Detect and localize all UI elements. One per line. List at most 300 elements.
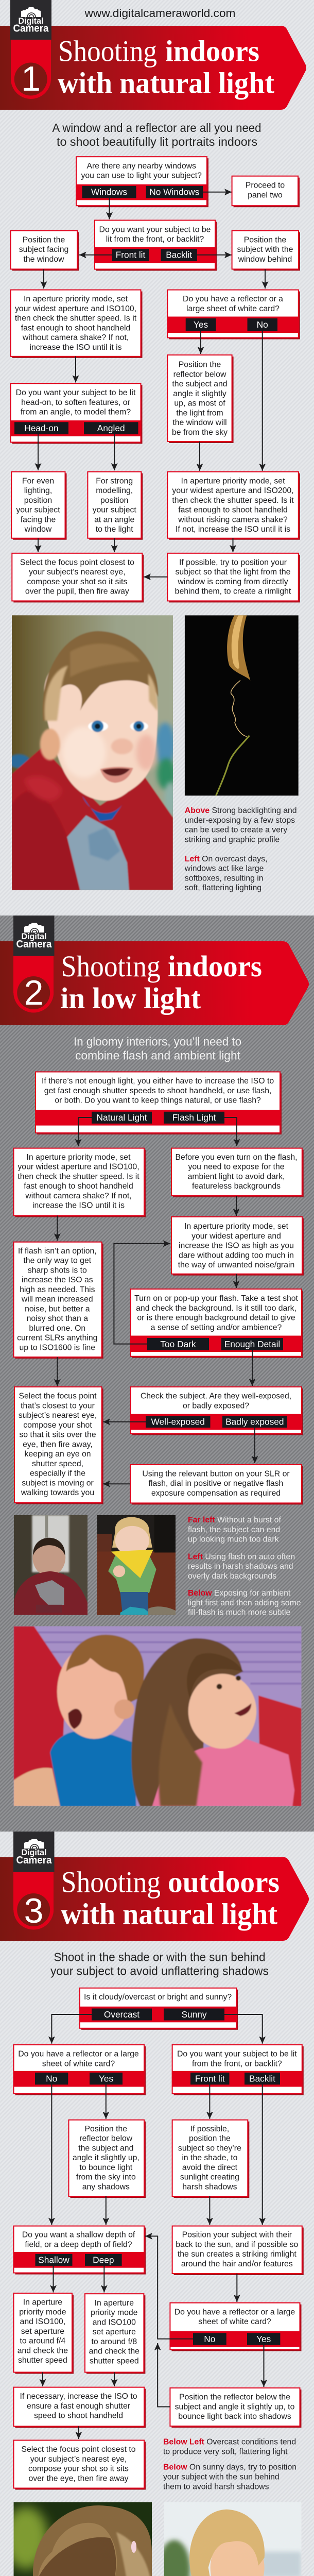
box: f/4: priority mode	[19, 2308, 66, 2316]
intro text section 2	[74, 1035, 241, 1062]
box: even lighting: For even	[22, 477, 54, 485]
decision: nearby windows: Windows	[91, 187, 127, 197]
decision: front or backlit outdoors: from the front, or backlit?	[192, 2059, 282, 2068]
box: select focus point section 2: shutter speed,	[32, 1460, 83, 1468]
box: even lighting: position	[24, 496, 52, 505]
box: position reflector: up, as most of	[174, 399, 225, 408]
caption section 1: soft, flattering lighting	[185, 884, 261, 892]
box: aperture priority ISO200: without risking camera shake?	[178, 515, 288, 524]
box: f/8: priority mode	[91, 2309, 138, 2317]
decision: cloudy or sunny: Is it cloudy/overcast or bright and sunny?	[84, 1993, 232, 2002]
decision: head-on or angled	[11, 383, 142, 444]
section 3 banner: 3	[24, 1891, 43, 1930]
intro text section 3: Shoot in the shade or with the sun behind	[54, 1951, 266, 1964]
arrow: backlit	[197, 255, 232, 256]
box: rimlight: behind them, to create a rimlight	[175, 587, 291, 596]
box: even lighting: your subject	[16, 506, 60, 515]
decision: head-on or angled: Angled	[97, 423, 125, 433]
arrow: backlit	[262, 2084, 263, 2225]
box: increase ISO: dare without adding too much in	[179, 1251, 294, 1260]
box: aperture priority low light: your widest aperture and ISO100,	[18, 1163, 139, 1172]
decision: reflector backlit: Do you have a reflector or a large	[175, 2308, 295, 2316]
section 2 banner: indoors	[168, 950, 262, 983]
box: position reflector: angle it slightly	[173, 389, 226, 398]
arrow: too dark loops back	[114, 1244, 170, 1344]
arrow: yes reflector	[264, 2345, 265, 2387]
decision: reflector outdoors: No	[46, 2073, 57, 2083]
decision: test shot	[131, 1289, 303, 1358]
box: if flash isn't an option: the only way to get	[23, 1257, 92, 1265]
box: f/8: In aperture	[95, 2299, 134, 2308]
box: aperture priority ISO200: your widest aperture and ISO200,	[172, 486, 294, 495]
decision: test shot: Enough Detail	[224, 1339, 280, 1349]
box: select focus point section 2: especially if the	[30, 1469, 85, 1478]
decision: front or backlit: Front lit	[116, 249, 146, 260]
arrow: up to depth of field	[158, 2343, 170, 2407]
caption section 1: softboxes, resulting in	[185, 874, 264, 883]
box: f/4: In aperture	[23, 2298, 62, 2307]
photo: backlit silhouette profile	[184, 615, 299, 795]
decision: cloudy or sunny: Sunny	[181, 2009, 207, 2020]
photo: baby too dark against window	[13, 1515, 88, 1615]
caption section 2: fill-flash is much more subtle	[188, 1608, 290, 1617]
box: even lighting: lighting,	[24, 486, 52, 495]
logo section 3: Digital	[22, 1848, 46, 1857]
box: increase ISO: increase the ISO as high as you	[179, 1242, 294, 1250]
photo: laughing girl in pink cardigan	[13, 2502, 152, 2576]
box: position in shade: position the	[189, 2134, 231, 2143]
box: aperture priority low light: without camera shake? If not,	[25, 1192, 132, 1200]
box: if flash isn't an option: increase the ISO as	[22, 1276, 93, 1284]
caption section 3	[163, 2438, 296, 2491]
box: position reflector outdoors	[69, 2120, 146, 2198]
box: select focus point section 2: subject’s nearest eye,	[19, 1411, 97, 1420]
caption section 2: Left	[188, 1552, 203, 1561]
logo section 1: Camera	[13, 23, 49, 34]
decision: depth of field	[13, 2226, 146, 2275]
decision: check the subject	[131, 1387, 303, 1435]
logo section 1	[10, 0, 51, 40]
decision: nearby windows: you can use to light your subject?	[81, 172, 202, 180]
box: back to the sun: the sun creates a striking rimlight	[178, 2250, 296, 2259]
box: position reflector: be from the sky	[172, 428, 228, 437]
intro text section 1: A window and a reflector are all you need	[53, 121, 261, 134]
box: f/8: and ISO100	[93, 2318, 136, 2327]
panel background: section 2	[0, 916, 314, 1832]
decision: natural or flash	[36, 1072, 282, 1134]
arrow	[75, 357, 76, 382]
caption section 2: flash, the subject can end	[188, 1526, 280, 1534]
box: position in shade: subject so they’re	[178, 2144, 241, 2153]
box: select focus point section 2: so that it sits over the	[19, 1431, 96, 1439]
arrow	[53, 2266, 54, 2293]
box: rimlight	[167, 553, 300, 602]
intro text section 3: your subject to avoid unflattering shadows	[50, 1964, 269, 1977]
box: position in shade: harsh shadows	[182, 2182, 237, 2191]
section 1 banner: indoors	[165, 35, 259, 68]
box: aperture priority ISO100: In aperture priority mode, set	[24, 295, 128, 303]
intro text section 1: to shoot beautifully lit portraits indoors	[57, 135, 257, 148]
box: back to the sun: around the hair and/or features	[181, 2260, 293, 2268]
decision: front or backlit outdoors: Front lit	[195, 2073, 225, 2083]
arrow: front lit	[79, 255, 112, 256]
decision: head-on or angled: from an angle, to model them?	[21, 408, 131, 417]
box: aperture priority ISO200: In aperture priority mode, set	[181, 477, 285, 485]
arrow: enough detail	[252, 1350, 253, 1386]
section 3 banner: Shooting	[61, 1866, 161, 1899]
box: increase ISO: your widest aperture and	[191, 1232, 281, 1241]
box: strong modelling: at an angle	[94, 515, 134, 524]
decision: head-on or angled: Head-on	[24, 423, 59, 433]
caption section 1: On overcast days,	[200, 855, 267, 863]
box: position reflector outdoors: Position the	[85, 2125, 127, 2133]
box: if flash isn't an option: will mean increased	[21, 1295, 93, 1304]
box: strong modelling: your subject	[93, 506, 136, 515]
decision: test shot: and check the background. Is it still too dark,	[136, 1304, 296, 1313]
arrow	[106, 2196, 107, 2225]
box: reflector below the subject: bounce light back into shadows	[178, 2412, 291, 2421]
arrow	[236, 2274, 237, 2302]
decision: depth of field: Deep	[93, 2255, 114, 2265]
box: select focus point section 3	[13, 2440, 146, 2489]
caption section 1: Above	[185, 806, 210, 815]
caption section 2: up looking much too dark	[188, 1535, 279, 1544]
decision: reflector backlit: Yes	[256, 2334, 271, 2344]
caption section 1: Strong backlighting and	[210, 806, 297, 815]
logo section 2: Digital	[22, 931, 46, 941]
intro text section 2: combine flash and ambient light	[75, 1048, 241, 1062]
box: aperture priority low light: increase the ISO until it is	[32, 1201, 125, 1210]
decision: test shot: Turn on or pop-up your flash. Take a test shot	[134, 1294, 299, 1303]
decision: reflector: Yes	[194, 319, 208, 330]
box: expose for ambient: featureless backgrounds	[192, 1182, 281, 1191]
arrow	[103, 2266, 104, 2293]
box: proceed to panel two: Proceed to	[246, 181, 285, 190]
section 1 banner: 1	[21, 59, 41, 98]
box: expose for ambient: ambient light to avoid dark,	[188, 1172, 285, 1181]
decision: reflector	[167, 290, 300, 339]
section 3 banner	[0, 1857, 309, 1941]
caption section 2: Without a burst of	[215, 1516, 281, 1524]
decision: depth of field: Do you want a shallow depth of	[22, 2231, 135, 2240]
box: if flash isn't an option: noisy shot than a	[27, 1314, 88, 1323]
decision: reflector: Do you have a reflector or a	[183, 295, 283, 303]
box: f/8: set aperture	[93, 2328, 136, 2336]
logo section 3	[13, 1832, 55, 1872]
arrow: no reflector	[51, 2084, 52, 2225]
box: aperture priority ISO200	[167, 472, 300, 540]
arrow	[114, 538, 115, 552]
section 1 banner: with natural light	[58, 66, 275, 100]
box: increase ISO: the way of unwanted noise/grain	[178, 1261, 294, 1269]
box: if flash isn't an option: up to ISO1600 is fine	[20, 1343, 95, 1352]
arrow: no windows	[203, 192, 232, 193]
box: aperture priority ISO100: fast enough to shoot handheld	[21, 324, 130, 332]
decision: reflector backlit: No	[204, 2334, 215, 2344]
box: if flash isn't an option	[13, 1242, 103, 1359]
decision: nearby windows: Are there any nearby windows	[86, 162, 196, 171]
box: flash compensation: Using the relevant button on your SLR or	[142, 1469, 290, 1478]
box: aperture priority low light: then check the shutter speed. Is it	[18, 1172, 139, 1181]
box: if flash isn't an option: high as needed. This	[20, 1285, 95, 1294]
arrow	[38, 538, 39, 552]
box: position reflector	[167, 355, 234, 443]
decision: natural or flash: Flash Light	[172, 1112, 216, 1123]
arrow	[38, 434, 39, 470]
decision: check the subject: Well-exposed	[151, 1417, 205, 1427]
decision: natural or flash: get fast enough shutter speeds to shoot handheld, or use flash,	[44, 1087, 271, 1095]
box: position in shade: in the shade, to	[182, 2154, 238, 2162]
box: position facing window	[11, 231, 79, 270]
decision: cloudy or sunny: Overcast	[104, 2009, 139, 2020]
arrow	[209, 2196, 210, 2225]
box: flash compensation: exposure compensation as required	[151, 1489, 281, 1498]
photo: boy with ice-cream cone	[164, 2502, 302, 2576]
box: proceed to panel two	[232, 176, 300, 207]
box: reflector below the subject: Position the reflector below the	[179, 2393, 290, 2402]
decision: natural or flash: Natural Light	[97, 1112, 147, 1123]
section 2 banner: in low light	[61, 981, 201, 1015]
section 1 banner	[0, 26, 306, 110]
decision: cloudy or sunny	[80, 1988, 238, 2030]
decision: front or backlit outdoors: Backlit	[249, 2073, 275, 2083]
box: aperture priority ISO100: without camera shake? If not,	[22, 333, 129, 342]
box: back to the sun: back to the sun, and if possible so	[176, 2240, 299, 2249]
box: f/8	[85, 2294, 145, 2374]
decision: nearby windows: No Windows	[149, 187, 200, 197]
arrow	[42, 2372, 43, 2386]
box: position window behind: subject with the	[237, 245, 293, 254]
box: aperture priority low light: fast enough to shoot handheld	[24, 1182, 133, 1191]
website address top: www.digitalcameraworld.com	[84, 7, 235, 20]
box: position reflector outdoors: any shadows	[82, 2182, 130, 2191]
box: position reflector outdoors: to bounce light	[79, 2163, 133, 2172]
caption section 2: Below	[188, 1589, 212, 1598]
arrow	[199, 442, 200, 471]
intro text section 1	[53, 121, 261, 148]
photo: smiling baby in red top	[12, 615, 173, 890]
box: position facing window: the window	[23, 255, 64, 264]
arrow: natural	[78, 1117, 92, 1146]
decision: reflector outdoors	[13, 2045, 146, 2095]
caption section 3: to produce very soft, flattering light	[163, 2447, 288, 2456]
caption section 2: results in harsh shadows and	[188, 1562, 293, 1571]
box: if flash isn't an option: noise, but better a	[25, 1304, 90, 1313]
decision: reflector backlit	[170, 2303, 302, 2351]
arrow: no	[262, 331, 263, 471]
box: position reflector: the subject and	[172, 380, 228, 388]
decision: front or backlit: Backlit	[166, 249, 192, 260]
arrow	[236, 1274, 237, 1288]
decision: reflector outdoors: sheet of white card?	[42, 2059, 115, 2068]
box: f/4: shutter speed	[18, 2356, 67, 2365]
decision: natural or flash: or both. Do you want to keep things natural, or use flash?	[55, 1096, 261, 1105]
box: strong modelling: position	[100, 496, 128, 505]
logo section 2	[13, 916, 55, 956]
box: select focus point: Select the focus point closest to	[20, 558, 134, 567]
decision: reflector outdoors: Yes	[99, 2073, 113, 2083]
caption section 2: Far left	[188, 1516, 215, 1524]
photo: toddler with harsh flash	[97, 1515, 176, 1615]
decision: front or backlit: lit from the front, or backlit?	[106, 235, 204, 244]
decision: depth of field: field, or a deep depth of field?	[25, 2240, 132, 2249]
box: aperture priority ISO100: increase the ISO until it is	[29, 343, 122, 352]
arrow: yes	[200, 331, 201, 354]
box: if flash isn't an option: blurred one. On	[29, 1324, 85, 1333]
box: select focus point section 2: Select the focus point	[19, 1392, 97, 1401]
box: strong modelling: to the light	[96, 525, 133, 534]
decision: test shot: or is there enough background detail to give	[137, 1314, 295, 1323]
box: select focus point section 2	[14, 1387, 103, 1504]
box: select focus point section 3: your subject’s nearest eye,	[30, 2455, 127, 2464]
decision: check the subject: Badly exposed	[225, 1417, 284, 1427]
section 2 banner: Shooting	[61, 950, 161, 983]
box: position in shade: sunlight creating	[180, 2173, 239, 2182]
decision: front or backlit outdoors: Do you want your subject to be lit	[177, 2049, 297, 2059]
panel background: section 3	[0, 1832, 314, 2576]
logo section 3: Camera	[16, 1855, 52, 1866]
caption section 3: them to avoid harsh shadows	[163, 2482, 269, 2491]
box: aperture priority ISO200: then check the shutter speed. Is it	[172, 496, 294, 505]
box: position facing window: Position the	[23, 235, 65, 244]
arrow down left	[43, 269, 44, 289]
box: aperture priority ISO200: fast enough to shoot handheld	[178, 506, 288, 515]
box: even lighting: window	[24, 525, 52, 534]
decision: natural or flash: If there’s not enough light, you either have to increase the ISO to	[42, 1077, 274, 1086]
decision: reflector backlit: sheet of white card?	[198, 2317, 271, 2326]
arrow: front lit	[209, 2084, 210, 2119]
photo: two laughing children on red sofa	[13, 1626, 302, 1806]
section 3 banner: outdoors	[168, 1866, 280, 1899]
box: select focus point section 3: over the eye, then fire away	[28, 2474, 129, 2483]
caption section 1: under-exposing by a few stops	[185, 816, 295, 825]
box: select focus point section 2: that’s closest to your	[21, 1401, 95, 1410]
arrow: sunny	[224, 2014, 263, 2044]
box: flash compensation	[130, 1465, 303, 1504]
box: strong modelling	[88, 472, 143, 540]
box: select focus point: compose your shot so it sits	[27, 578, 127, 586]
decision: depth of field: Shallow	[38, 2255, 69, 2265]
box: aperture priority ISO100: your widest aperture and ISO100,	[15, 304, 136, 313]
box: select focus point section 2: keeping an eye on	[24, 1450, 91, 1459]
box: position window behind: window behind	[238, 255, 292, 264]
box: rimlight: If possible, try to position your	[179, 558, 287, 567]
caption section 1: striking and graphic profile	[185, 835, 280, 844]
arrow: flash	[224, 1117, 237, 1146]
arrow: yes reflector	[106, 2084, 107, 2119]
caption section 1	[184, 806, 297, 892]
box: aperture priority ISO100: then check the shutter speed. Is it	[15, 314, 137, 323]
decision: head-on or angled: head-on, to soften features, or	[21, 398, 130, 407]
decision: check the subject: or badly exposed?	[183, 1401, 249, 1410]
box: position in shade: avoid the direct	[182, 2163, 238, 2172]
section 1 banner: Shooting	[58, 35, 157, 68]
box: select focus point section 2: subject is moving or	[22, 1479, 94, 1487]
box: even lighting	[11, 472, 67, 540]
box: select focus point section 2: compose your shot	[23, 1421, 92, 1430]
box: position reflector outdoors: the subject and	[78, 2144, 133, 2153]
box: flash compensation: flash, dial in positive or negative flash	[149, 1479, 283, 1488]
arrow: overcast	[51, 2014, 92, 2044]
box: if flash isn't an option: If flash isn’t an option,	[18, 1247, 97, 1256]
logo section 2: Camera	[16, 939, 52, 950]
box: position in shade: If possible,	[190, 2125, 229, 2133]
panel background: section 1	[0, 0, 314, 916]
box: increase ISO outdoors: If necessary, increase the ISO to	[20, 2392, 137, 2401]
decision: front or backlit: Do you want your subject to be	[99, 225, 211, 234]
box: position reflector: Position the	[179, 361, 221, 369]
box: select focus point	[12, 553, 144, 602]
caption section 2	[188, 1516, 301, 1617]
decision: check the subject: Check the subject. Are they well-exposed,	[141, 1392, 291, 1401]
box: position reflector outdoors: reflector below	[79, 2134, 133, 2143]
decision: nearby windows	[76, 157, 208, 207]
section 2 banner	[0, 941, 309, 1025]
box: aperture priority ISO200: If not, increase the ISO until it is	[176, 525, 290, 534]
arrow: windows	[109, 198, 110, 219]
box: position facing window: subject facing	[19, 245, 68, 254]
box: expose for ambient: you need to expose for the	[188, 1163, 285, 1172]
box: increase ISO outdoors	[13, 2387, 146, 2428]
box: select focus point section 2: walking towards you	[21, 1488, 94, 1497]
arrow	[103, 1421, 146, 1422]
box: select focus point section 3: Select the focus point closest to	[21, 2445, 136, 2454]
box: f/4: set aperture	[21, 2327, 64, 2336]
arrow	[144, 577, 167, 578]
box: f/8: and check the	[89, 2347, 139, 2356]
arrow	[57, 1216, 58, 1241]
caption section 1: can be used to create a very	[185, 825, 287, 835]
box: position reflector outdoors: angle it slightly up,	[73, 2154, 139, 2162]
caption section 3: Overcast conditions tend	[204, 2438, 296, 2447]
decision: test shot: a sense of setting and/or ambience?	[151, 1323, 282, 1332]
box: rimlight: window is coming from directly	[177, 578, 288, 586]
box: reflector below the subject	[170, 2388, 302, 2428]
arrow	[103, 1483, 130, 1484]
box: increase ISO	[171, 1217, 304, 1276]
box: select focus point section 3: compose your shot so it sits	[28, 2465, 129, 2473]
arrow	[233, 538, 234, 552]
decision: front or backlit outdoors	[172, 2045, 304, 2095]
box: position in shade	[172, 2120, 249, 2198]
intro text section 3	[50, 1951, 269, 1977]
caption section 2: overly dark backgrounds	[188, 1572, 276, 1581]
box: aperture priority low light	[13, 1148, 146, 1217]
box: position reflector outdoors: from the sky into	[76, 2173, 136, 2182]
box: position window behind	[232, 231, 300, 270]
arrow	[114, 2372, 115, 2386]
box: f/8: shutter speed	[90, 2357, 139, 2365]
box: select focus point section 2: eye, then fire away,	[23, 1440, 93, 1449]
box: expose for ambient	[171, 1148, 304, 1197]
box: back to the sun: Position your subject with their	[182, 2231, 292, 2240]
caption section 2: light first and then adding some	[188, 1599, 301, 1607]
decision: test shot: Too Dark	[160, 1339, 196, 1349]
box: increase ISO outdoors: ensure a fast enough shutter	[27, 2402, 130, 2411]
box: back to the sun	[172, 2226, 304, 2275]
box: expose for ambient: Before you even turn on the flash,	[175, 1153, 298, 1162]
box: increase ISO: In aperture priority mode, set	[184, 1222, 289, 1231]
arrow	[236, 1196, 237, 1216]
box: position reflector: reflector below	[173, 370, 226, 379]
box: reflector below the subject: subject and angle it slightly up, to	[175, 2402, 295, 2411]
caption section 3: On sunny days, try to position	[187, 2463, 296, 2472]
arrow	[254, 1428, 255, 1463]
box: f/4: to around f/4	[20, 2337, 65, 2346]
box: if flash isn't an option: current SLRs anything	[17, 1334, 97, 1343]
box: increase ISO outdoors: speed to shoot handheld	[34, 2412, 123, 2420]
box: proceed to panel two: panel two	[248, 191, 283, 199]
